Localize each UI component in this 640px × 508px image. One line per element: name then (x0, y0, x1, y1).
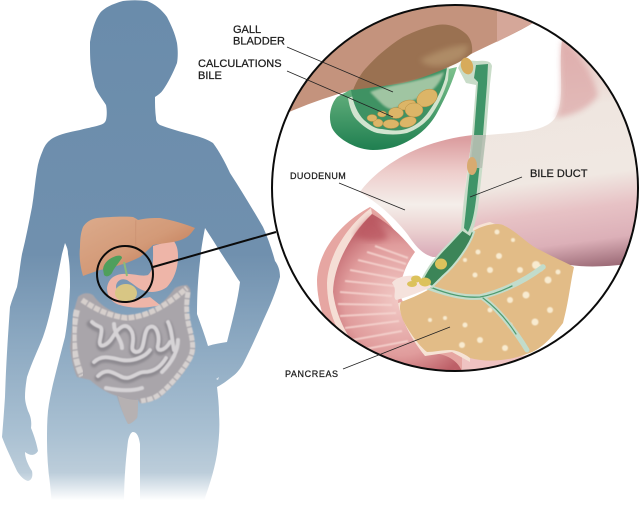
gall bladder speckle texture (420, 45, 468, 66)
stones at papilla (407, 276, 431, 287)
gall bladder outer wall (330, 67, 457, 150)
liver highlight (497, 11, 532, 42)
magnifier ring small (97, 246, 153, 302)
pancreas dots (428, 230, 560, 351)
label: bile duct: BILE DUCT (530, 168, 588, 180)
stomach small (107, 240, 178, 308)
gall bladder small (103, 256, 122, 276)
pancreas (400, 224, 574, 361)
colon band right (141, 292, 193, 401)
magnified circle ring (272, 5, 638, 371)
duodenum wall (317, 207, 470, 375)
label: gall bladder: GALL (233, 24, 261, 36)
rectum (118, 396, 138, 424)
bile duct small (124, 262, 127, 276)
label: calculations bile: CALCULATIONS (198, 58, 282, 70)
lower duct green (422, 228, 474, 287)
stone in lower duct (435, 258, 447, 270)
stone in neck (460, 58, 474, 74)
magnified circle panel (290, 6, 637, 370)
stomach top pink shade (555, 40, 598, 118)
stomach upper (430, 40, 637, 266)
duodenum pale inner wall (327, 208, 372, 336)
human body silhouette (2, 0, 280, 506)
gall bladder pale rim (348, 67, 449, 134)
gallstones (367, 86, 441, 129)
liver small (80, 217, 195, 276)
colon band left (74, 310, 82, 376)
dark top of lining (354, 216, 388, 241)
label: pancreas: PANCREAS (285, 369, 339, 379)
pancreatic duct (428, 267, 543, 350)
small intestine loops dark (90, 324, 174, 380)
hip white speck (216, 377, 219, 380)
pancreas rim (398, 222, 500, 362)
stone in duct (467, 157, 477, 175)
abdominal organs (70, 217, 195, 424)
small intestine loops light (92, 322, 178, 390)
colon band top (82, 288, 187, 318)
duodenum ribbed lining (333, 214, 462, 375)
gall bladder green interior (351, 68, 447, 130)
label: calculations bile: BILE (198, 70, 222, 82)
bile duct upper (458, 60, 492, 236)
connector line (153, 232, 276, 267)
pancreas small (115, 284, 137, 302)
liver section (290, 6, 532, 112)
label: gall bladder: BLADDER (233, 36, 285, 48)
bile duct upper green (464, 64, 488, 232)
colon (70, 285, 195, 423)
papilla (392, 276, 432, 300)
bile speckled area (370, 72, 444, 109)
stomach lobe (360, 135, 473, 257)
liver midline (134, 220, 137, 250)
lining ribs (338, 246, 408, 350)
leader lines (287, 47, 522, 369)
armpit gap right (197, 228, 240, 346)
gall bladder brown upper part (353, 24, 472, 90)
duct pale section over stomach (469, 135, 486, 168)
lower right pale tissue (462, 355, 527, 370)
label: duodenum: DUODENUM (290, 171, 346, 181)
